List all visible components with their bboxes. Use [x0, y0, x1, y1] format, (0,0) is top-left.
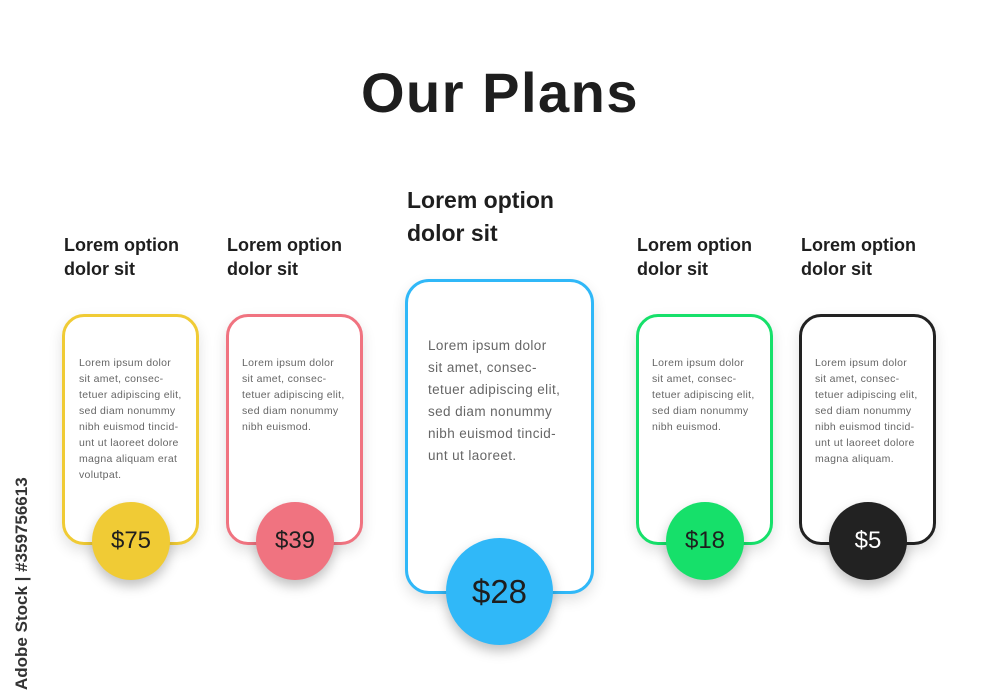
text 2: tetuer adipiscing elit, [242, 389, 345, 401]
text 3: Lorem ipsum dolor [428, 338, 547, 353]
card 4 [636, 314, 773, 545]
heading 1: dolor sit [64, 259, 135, 279]
price 2 [256, 502, 334, 580]
plan 3: blue (featured) [401, 187, 598, 657]
heading 4: Lorem option [637, 235, 752, 255]
price 1: $75 [111, 527, 151, 554]
price 1 [92, 502, 170, 580]
text 2: nibh euismod. [242, 421, 311, 433]
text 4: sed diam nonummy [652, 405, 748, 417]
text 1: tetuer adipiscing elit, [79, 389, 182, 401]
text 2: Lorem ipsum dolor [242, 357, 334, 369]
price 4 [666, 502, 744, 580]
card 2 [226, 314, 363, 545]
heading 5: dolor sit [801, 259, 872, 279]
heading 3: dolor sit [407, 220, 498, 246]
price 3: $28 [472, 572, 527, 610]
text 3: sit amet, consec- [428, 360, 537, 375]
heading 3 [407, 187, 554, 246]
text 4: Lorem ipsum dolor [652, 357, 744, 369]
text 3 [428, 338, 560, 463]
text 4: tetuer adipiscing elit, [652, 389, 755, 401]
text 1: nibh euismod tincid- [79, 421, 178, 433]
heading 4 [637, 235, 752, 279]
heading 2: Lorem option [227, 235, 342, 255]
text 1 [79, 357, 182, 481]
text 4: sit amet, consec- [652, 373, 736, 385]
text 3: tetuer adipiscing elit, [428, 382, 560, 397]
card 1 [62, 314, 199, 545]
plan 5: black [795, 235, 940, 592]
price 3 [446, 538, 553, 645]
text 1: unt ut laoreet dolore [79, 437, 179, 449]
text 5: unt ut laoreet dolore [815, 437, 915, 449]
card 3 [405, 279, 594, 594]
text 1: Lorem ipsum dolor [79, 357, 171, 369]
price 5: $5 [855, 527, 881, 554]
text 1: volutpat. [79, 469, 121, 481]
heading 1: Lorem option [64, 235, 179, 255]
title: Our Plans [361, 61, 639, 124]
plan 1: yellow [58, 235, 203, 592]
text 1: sed diam nonummy [79, 405, 175, 417]
heading 3: Lorem option [407, 187, 554, 213]
text 5: tetuer adipiscing elit, [815, 389, 918, 401]
heading 5: Lorem option [801, 235, 916, 255]
text 5: magna aliquam. [815, 453, 894, 465]
heading 4: dolor sit [637, 259, 708, 279]
text 5: sed diam nonummy [815, 405, 911, 417]
text 2 [242, 357, 345, 433]
text 3: nibh euismod tincid- [428, 426, 556, 441]
text 5: sit amet, consec- [815, 373, 899, 385]
text 2: sed diam nonummy [242, 405, 338, 417]
text 5 [815, 357, 918, 465]
text 5: Lorem ipsum dolor [815, 357, 907, 369]
side credit: Adobe Stock | #359756613 [12, 477, 31, 690]
text 1: magna aliquam erat [79, 453, 177, 465]
text 1: sit amet, consec- [79, 373, 163, 385]
text 3: unt ut laoreet. [428, 448, 517, 463]
text 4: nibh euismod. [652, 421, 721, 433]
heading 5 [801, 235, 916, 279]
text 4 [652, 357, 755, 433]
heading 1 [64, 235, 179, 279]
text 3: sed diam nonummy [428, 404, 552, 419]
price 4: $18 [685, 527, 725, 554]
text 5: nibh euismod tincid- [815, 421, 914, 433]
heading 2 [227, 235, 342, 279]
plan 4: green [632, 235, 777, 592]
price 2: $39 [275, 527, 315, 554]
plan 2: pink [222, 235, 367, 592]
price 5 [829, 502, 907, 580]
text 2: sit amet, consec- [242, 373, 326, 385]
card 5 [799, 314, 936, 545]
heading 2: dolor sit [227, 259, 298, 279]
